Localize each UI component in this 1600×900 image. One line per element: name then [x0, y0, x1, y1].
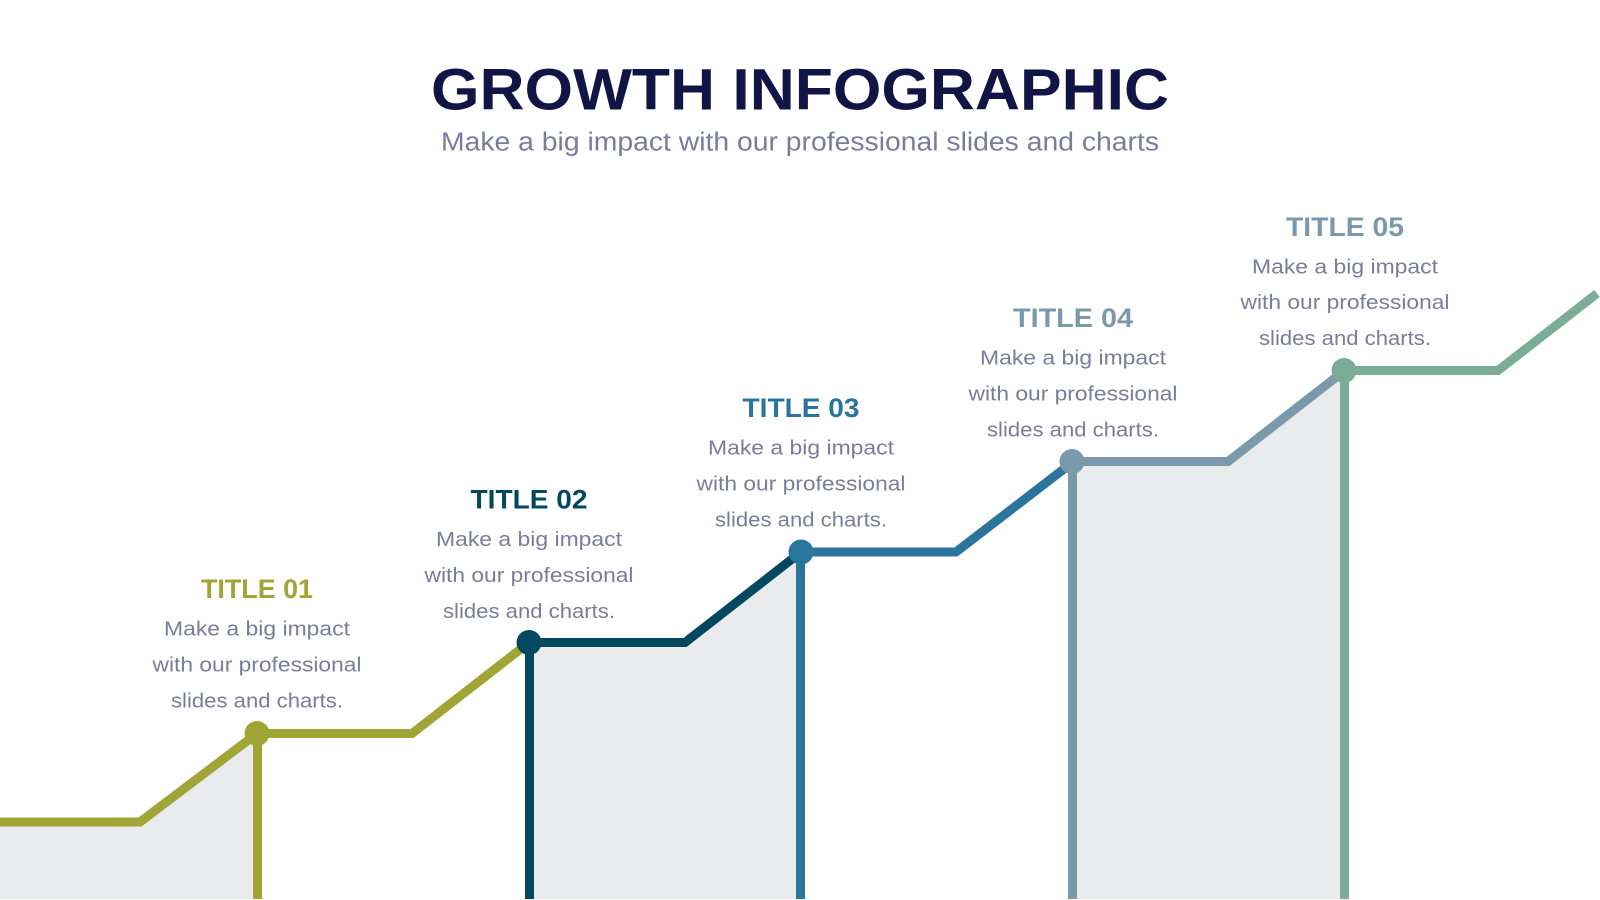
text block: title 04: [967, 303, 1178, 442]
text block: title 02: slides and charts.: [443, 600, 615, 623]
step 4: line, stem and node: [1060, 371, 1344, 899]
text block: title 02: Make a big impact: [436, 528, 622, 551]
text block: title 04: slides and charts.: [987, 418, 1159, 442]
step 2: line, stem and node: [516, 552, 801, 899]
text block: title 04: with our professional: [967, 382, 1178, 406]
step 1: line, stem and node: [0, 642, 529, 899]
text block: title 04: TITLE 04: [1013, 303, 1133, 333]
text block: title 01: Make a big impact: [164, 618, 350, 640]
subtitle: Make a big impact with our professional slides and charts: [441, 128, 1159, 156]
text block: title 03: Make a big impact: [708, 436, 894, 460]
text block: title 03: with our professional: [695, 472, 906, 496]
text block: title 05: TITLE 05: [1286, 212, 1404, 242]
text block: title 05: with our professional: [1239, 291, 1450, 314]
header: [431, 58, 1169, 156]
text block: title 05: Make a big impact: [1252, 256, 1438, 278]
text block: title 03: [695, 393, 906, 532]
text block: title 05: [1239, 212, 1450, 350]
step 3: line, stem and node: [788, 462, 1073, 899]
text block: title 02: [423, 484, 634, 623]
text block: title 03: TITLE 03: [742, 393, 860, 423]
text block: title 01: [151, 574, 362, 712]
step 5: line, stem and node: [1332, 294, 1597, 899]
text block: title 04: Make a big impact: [980, 346, 1166, 370]
text block: title 01: TITLE 01: [201, 574, 313, 604]
text block: title 01: with our professional: [151, 654, 362, 676]
text block: title 05: slides and charts.: [1259, 327, 1431, 350]
text block: title 02: with our professional: [423, 564, 634, 587]
shaded areas under the growth line: [0, 370, 1344, 899]
text block: title 02: TITLE 02: [470, 484, 588, 514]
title: GROWTH INFOGRAPHIC: [431, 58, 1169, 122]
text block: title 01: slides and charts.: [171, 690, 343, 712]
text block: title 03: slides and charts.: [715, 508, 887, 532]
